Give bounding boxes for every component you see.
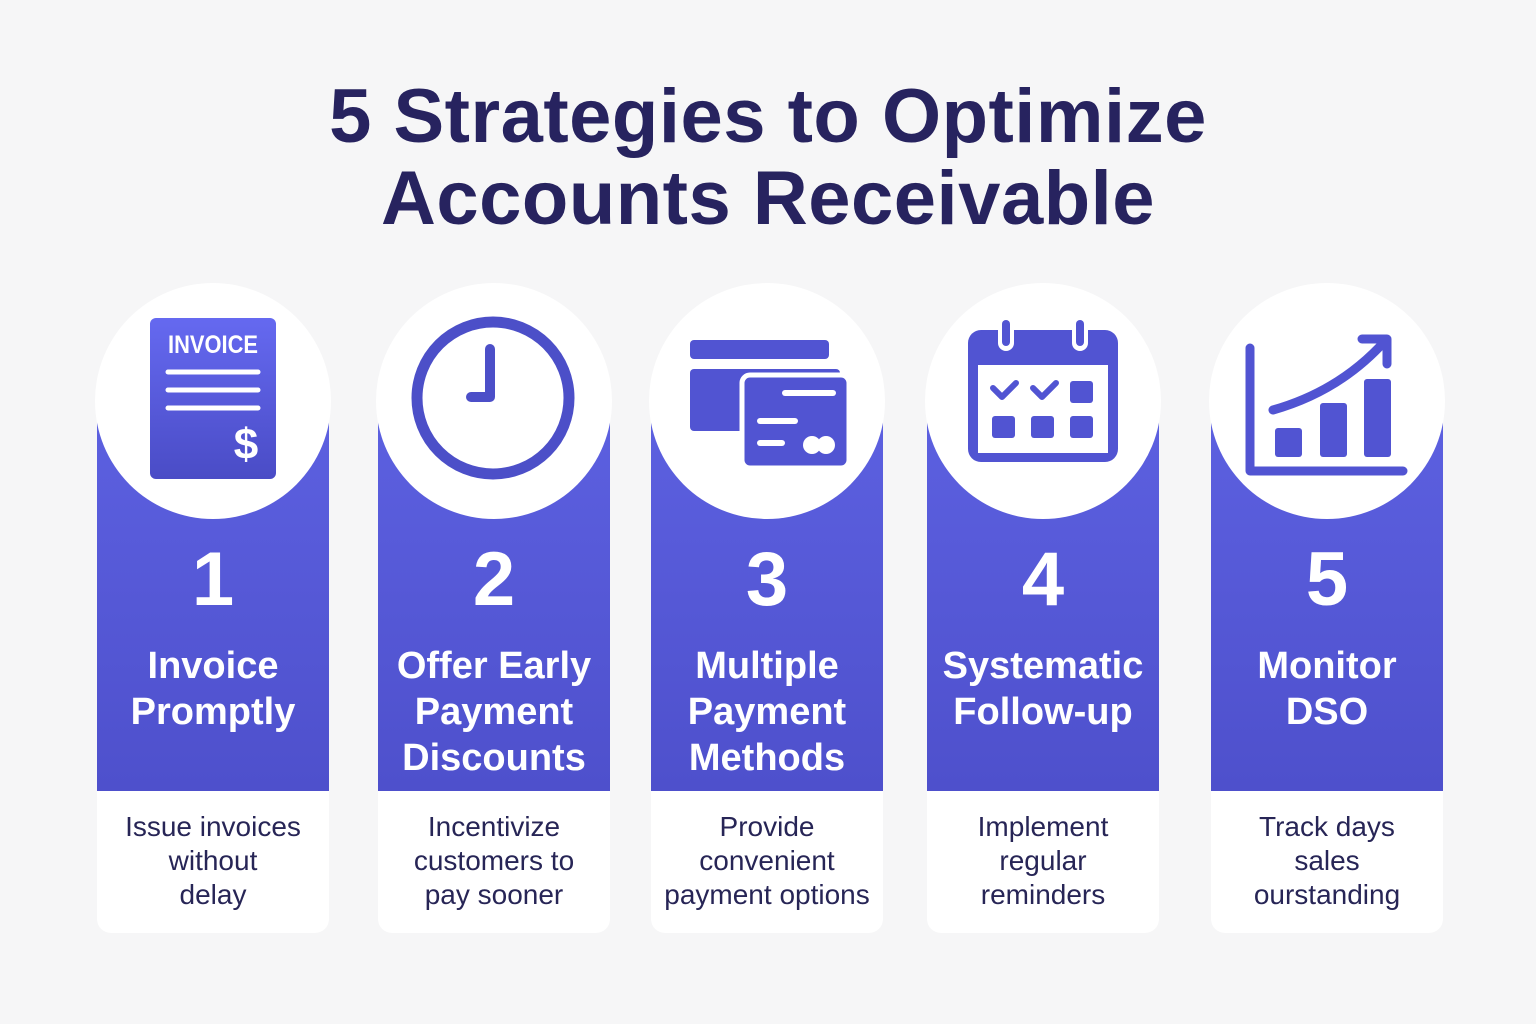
icon: growth chart <box>1246 334 1408 476</box>
number 4: 4 <box>1022 537 1064 622</box>
panel: 1 invoice promptly <box>95 283 331 933</box>
title <box>329 74 1207 241</box>
description 3: convenient <box>699 845 835 876</box>
description 1: Issue invoices <box>125 811 301 842</box>
description 3: payment options <box>664 879 870 910</box>
heading 3: Payment <box>688 691 846 733</box>
heading 4: Follow-up <box>953 691 1133 733</box>
number 2: 2 <box>473 537 515 622</box>
description 2 <box>378 791 610 933</box>
description 4: reminders <box>981 879 1105 910</box>
heading 1: Promptly <box>131 691 295 733</box>
icon: credit cards <box>690 340 846 466</box>
heading 3 <box>688 645 846 779</box>
heading 2: Offer Early <box>397 645 591 687</box>
icon: calendar <box>968 320 1118 462</box>
panel: 2 early payment discounts <box>376 283 612 933</box>
heading 1: Invoice <box>148 645 278 687</box>
description 4 <box>927 791 1159 933</box>
icon: invoice: $ <box>234 420 258 469</box>
heading 3: Methods <box>689 737 845 779</box>
icon: invoice <box>150 318 276 479</box>
number 1: 1 <box>192 537 234 622</box>
description 5 <box>1211 791 1443 933</box>
panel: 3 multiple payment methods <box>649 283 885 933</box>
description 1 <box>97 791 329 933</box>
description 2: Incentivize <box>428 811 560 842</box>
description 4: regular <box>999 845 1087 876</box>
number 5: 5 <box>1306 537 1348 622</box>
description 3 <box>651 791 883 933</box>
description 3: Provide <box>720 811 814 842</box>
heading 2: Discounts <box>402 737 586 779</box>
title: Accounts Receivable <box>381 156 1155 241</box>
title: 5 Strategies to Optimize <box>329 74 1207 159</box>
panel: 4 systematic follow-up <box>925 283 1161 933</box>
icon: invoice: INVOICE <box>168 331 258 359</box>
heading 5 <box>1257 645 1397 733</box>
heading 1 <box>131 645 296 733</box>
number 3: 3 <box>746 537 788 622</box>
description 2: pay sooner <box>425 879 563 910</box>
description 1: delay <box>180 879 246 910</box>
description 5: Track days <box>1259 811 1395 842</box>
description 5: sales <box>1294 845 1360 876</box>
description 2: customers to <box>414 845 574 876</box>
heading 3: Multiple <box>695 645 839 687</box>
heading 4: Systematic <box>943 645 1143 687</box>
description 1: without <box>169 845 257 876</box>
panel: 5 monitor DSO <box>1209 283 1445 933</box>
heading 2 <box>397 645 591 779</box>
description 5: ourstanding <box>1254 879 1400 910</box>
icon: clock <box>412 316 574 480</box>
heading 2: Payment <box>415 691 573 733</box>
heading 5: DSO <box>1286 691 1368 733</box>
heading 4 <box>943 645 1143 733</box>
description 4: Implement <box>978 811 1108 842</box>
heading 5: Monitor <box>1257 645 1397 687</box>
